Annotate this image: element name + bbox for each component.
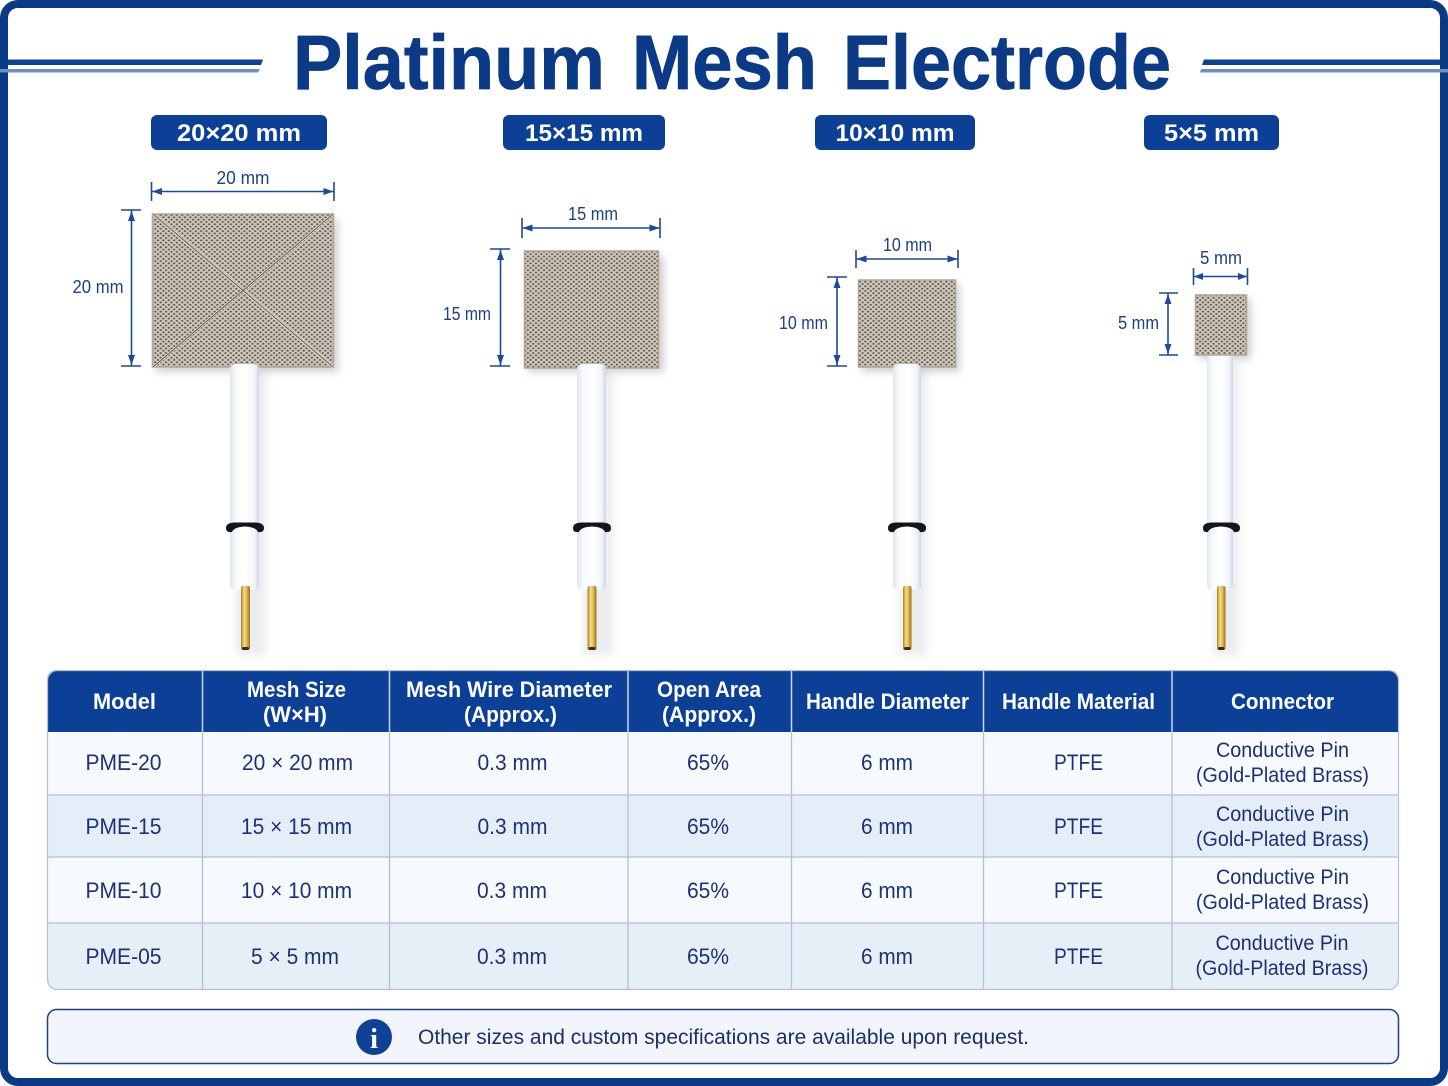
pin 20x20 (241, 586, 250, 650)
row PME-15: 15 × 15 mm (241, 814, 352, 839)
size badge: 5x5 (1144, 115, 1279, 150)
mesh 5x5 (1196, 295, 1246, 355)
icon: info (356, 1019, 392, 1055)
table rows background (47, 670, 1399, 990)
row PME-10 (86, 865, 1369, 914)
size badge: 20x20: 20×20 mm (177, 120, 301, 147)
table header: Model (93, 689, 156, 714)
title: Mesh (632, 20, 817, 106)
handle 15x15 (573, 364, 611, 590)
size badge: 20x20 (151, 115, 327, 150)
row PME-05: PTFE (1054, 944, 1103, 969)
row PME-20: PME-20 (86, 750, 162, 775)
right title rule (1200, 60, 1448, 72)
row PME-10: 0.3 mm (477, 878, 547, 903)
dimension: 20 mm width (152, 167, 334, 201)
pin 10x10 (903, 586, 912, 650)
size badge: 10x10: 10×10 mm (836, 120, 954, 147)
table header: Connector (1231, 689, 1334, 714)
size badge: 15x15: 15×15 mm (525, 120, 643, 147)
dimension: 20 mm height: 20 mm (72, 276, 124, 297)
table header: (Approx.) (464, 702, 557, 727)
row PME-05: 0.3 mm (477, 944, 547, 969)
handle 10x10 (888, 364, 926, 590)
row PME-05 (86, 931, 1368, 980)
row PME-20: 0.3 mm (478, 750, 548, 775)
table header: (Approx.) (662, 702, 756, 727)
row PME-05: (Gold-Plated Brass) (1196, 956, 1368, 980)
dimension: 5 mm height (1118, 293, 1178, 355)
size badge: 15x15 (503, 115, 665, 150)
pin 5x5 (1217, 586, 1226, 650)
dimension: 10 mm width (856, 234, 958, 268)
row PME-20 (86, 738, 1369, 787)
handle 5x5 (1203, 353, 1240, 590)
dimension: 15 mm width (522, 203, 660, 238)
specification table (47, 670, 1399, 990)
table header (93, 677, 1334, 727)
mesh 15x15 (524, 251, 658, 368)
left title rule (0, 60, 263, 72)
handle 20x20 (226, 364, 264, 590)
row PME-10: 65% (687, 878, 729, 903)
row PME-05: PME-05 (86, 944, 162, 969)
size badge: 5x5: 5×5 mm (1164, 120, 1259, 147)
electrode 5x5 (1196, 295, 1251, 655)
row PME-10: PME-10 (86, 878, 162, 903)
dimension: 15 mm width: 15 mm (568, 203, 618, 224)
row PME-20: 65% (687, 750, 729, 775)
row PME-15: PTFE (1054, 814, 1103, 839)
dimension: 5 mm height: 5 mm (1118, 312, 1159, 333)
row PME-10: Conductive Pin (1216, 865, 1349, 889)
row PME-15: (Gold-Plated Brass) (1196, 827, 1369, 851)
dimension: 15 mm height: 15 mm (443, 303, 491, 324)
electrode 10x10 (858, 280, 960, 655)
row PME-20: Conductive Pin (1216, 738, 1349, 762)
row PME-05: 65% (687, 944, 729, 969)
dimension: 20 mm width: 20 mm (216, 167, 270, 188)
dimension: 10 mm height (779, 277, 847, 366)
dimension: 15 mm height (443, 249, 510, 366)
icon: info: i (370, 1023, 378, 1055)
row PME-10: 10 × 10 mm (241, 878, 352, 903)
note text: Other sizes and custom specifications are available upon request. (418, 1026, 1029, 1049)
dimension: 10 mm width: 10 mm (883, 234, 932, 255)
row PME-20: PTFE (1054, 750, 1103, 775)
row PME-10: (Gold-Plated Brass) (1196, 890, 1369, 914)
row PME-10: PTFE (1054, 878, 1103, 903)
row PME-05: Conductive Pin (1216, 931, 1348, 955)
electrode 15x15 (524, 251, 664, 655)
dimension: 5 mm width (1194, 247, 1248, 285)
dimension: 20 mm height (72, 210, 141, 366)
table header: Handle Diameter (806, 689, 969, 714)
row PME-20: 20 × 20 mm (242, 750, 353, 775)
row PME-10: 6 mm (861, 878, 913, 903)
electrode 20x20 (152, 214, 338, 655)
row PME-15: Conductive Pin (1216, 802, 1349, 826)
table header: Mesh Wire Diameter (406, 677, 612, 702)
table header: (W×H) (263, 702, 327, 727)
note box (48, 1010, 1398, 1064)
row PME-15: 6 mm (861, 814, 913, 839)
mesh 10x10 (858, 280, 956, 367)
title: Electrode (843, 20, 1171, 106)
dimension: 5 mm width: 5 mm (1200, 247, 1242, 268)
table header: Mesh Size (247, 677, 346, 702)
title: Platinum (293, 20, 605, 106)
title (293, 20, 1171, 106)
dimension: 10 mm height: 10 mm (779, 312, 828, 333)
pin 15x15 (588, 586, 596, 650)
size badge: 10x10 (815, 115, 975, 150)
table header: Handle Material (1002, 689, 1155, 714)
row PME-15: 0.3 mm (478, 814, 548, 839)
row PME-15 (86, 802, 1369, 851)
row PME-20: 6 mm (861, 750, 913, 775)
row PME-20: (Gold-Plated Brass) (1196, 763, 1369, 787)
row PME-15: 65% (687, 814, 729, 839)
table header: Open Area (657, 677, 761, 702)
row PME-15: PME-15 (86, 814, 162, 839)
row PME-05: 5 × 5 mm (251, 944, 339, 969)
row PME-05: 6 mm (861, 944, 913, 969)
mesh 20x20 (152, 214, 334, 367)
